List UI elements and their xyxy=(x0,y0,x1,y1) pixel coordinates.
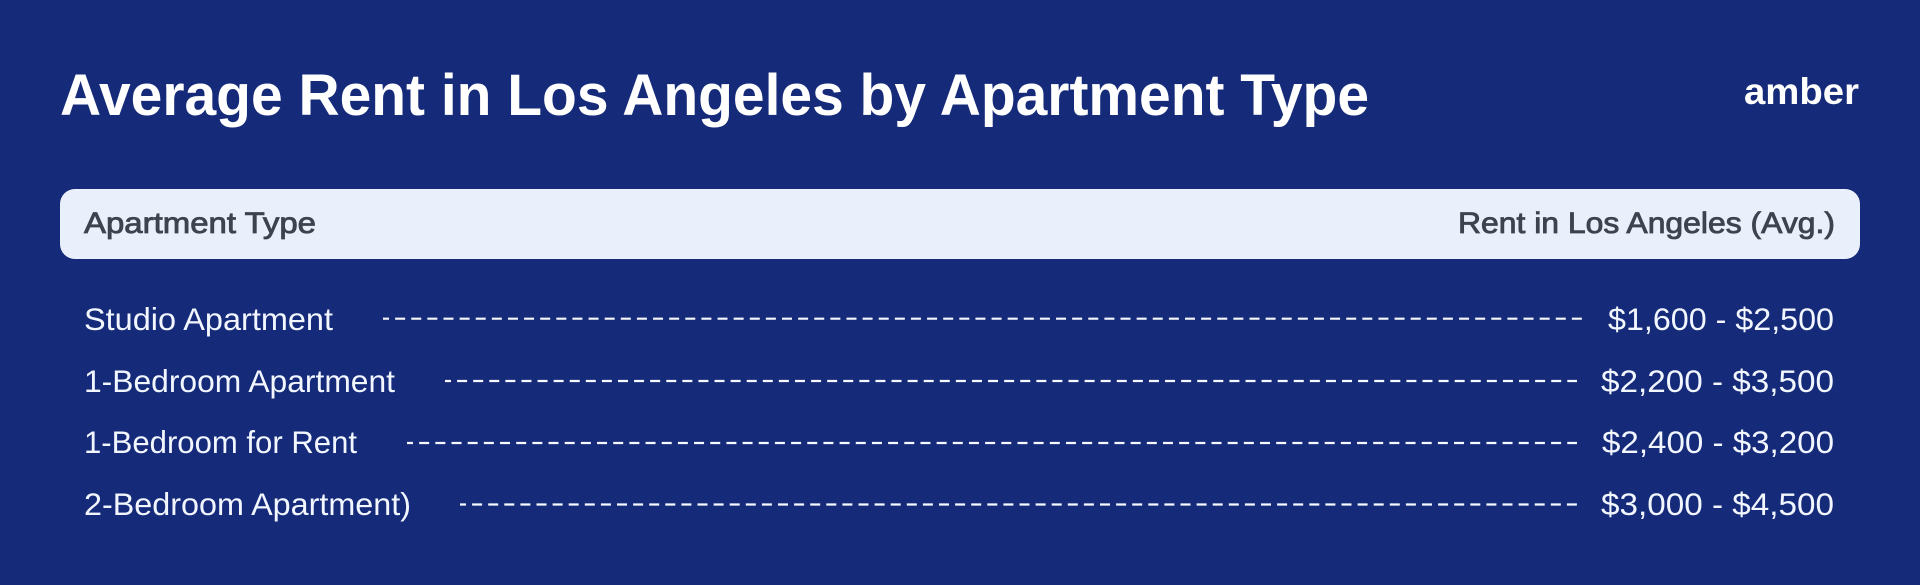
column heading: apartment type: Apartment Type xyxy=(84,207,316,240)
row: 2-bedroom apartment: $3,000 - $4,500 xyxy=(1601,486,1834,522)
row: 1-bedroom apartment xyxy=(84,363,1834,399)
table header xyxy=(60,189,1860,259)
column heading: rent: Rent in Los Angeles (Avg.) xyxy=(1458,207,1835,240)
logo: amber: amber xyxy=(1744,71,1859,112)
row: studio apartment xyxy=(84,301,1834,337)
row: 1-bedroom for rent: 1-Bedroom for Rent xyxy=(84,424,357,460)
row: 1-bedroom apartment: $2,200 - $3,500 xyxy=(1601,363,1834,399)
row: 1-bedroom for rent xyxy=(84,424,1834,460)
row: studio apartment: $1,600 - $2,500 xyxy=(1608,301,1834,337)
row: 1-bedroom apartment: 1-Bedroom Apartment xyxy=(84,363,395,399)
header bar xyxy=(60,189,1860,259)
row: studio apartment: Studio Apartment xyxy=(84,301,333,337)
row: 2-bedroom apartment xyxy=(84,486,1834,522)
title: Average Rent in Los Angeles by Apartment Type xyxy=(60,63,1369,128)
row: 1-bedroom for rent: $2,400 - $3,200 xyxy=(1602,424,1834,460)
row: 2-bedroom apartment: 2-Bedroom Apartment) xyxy=(84,486,411,522)
